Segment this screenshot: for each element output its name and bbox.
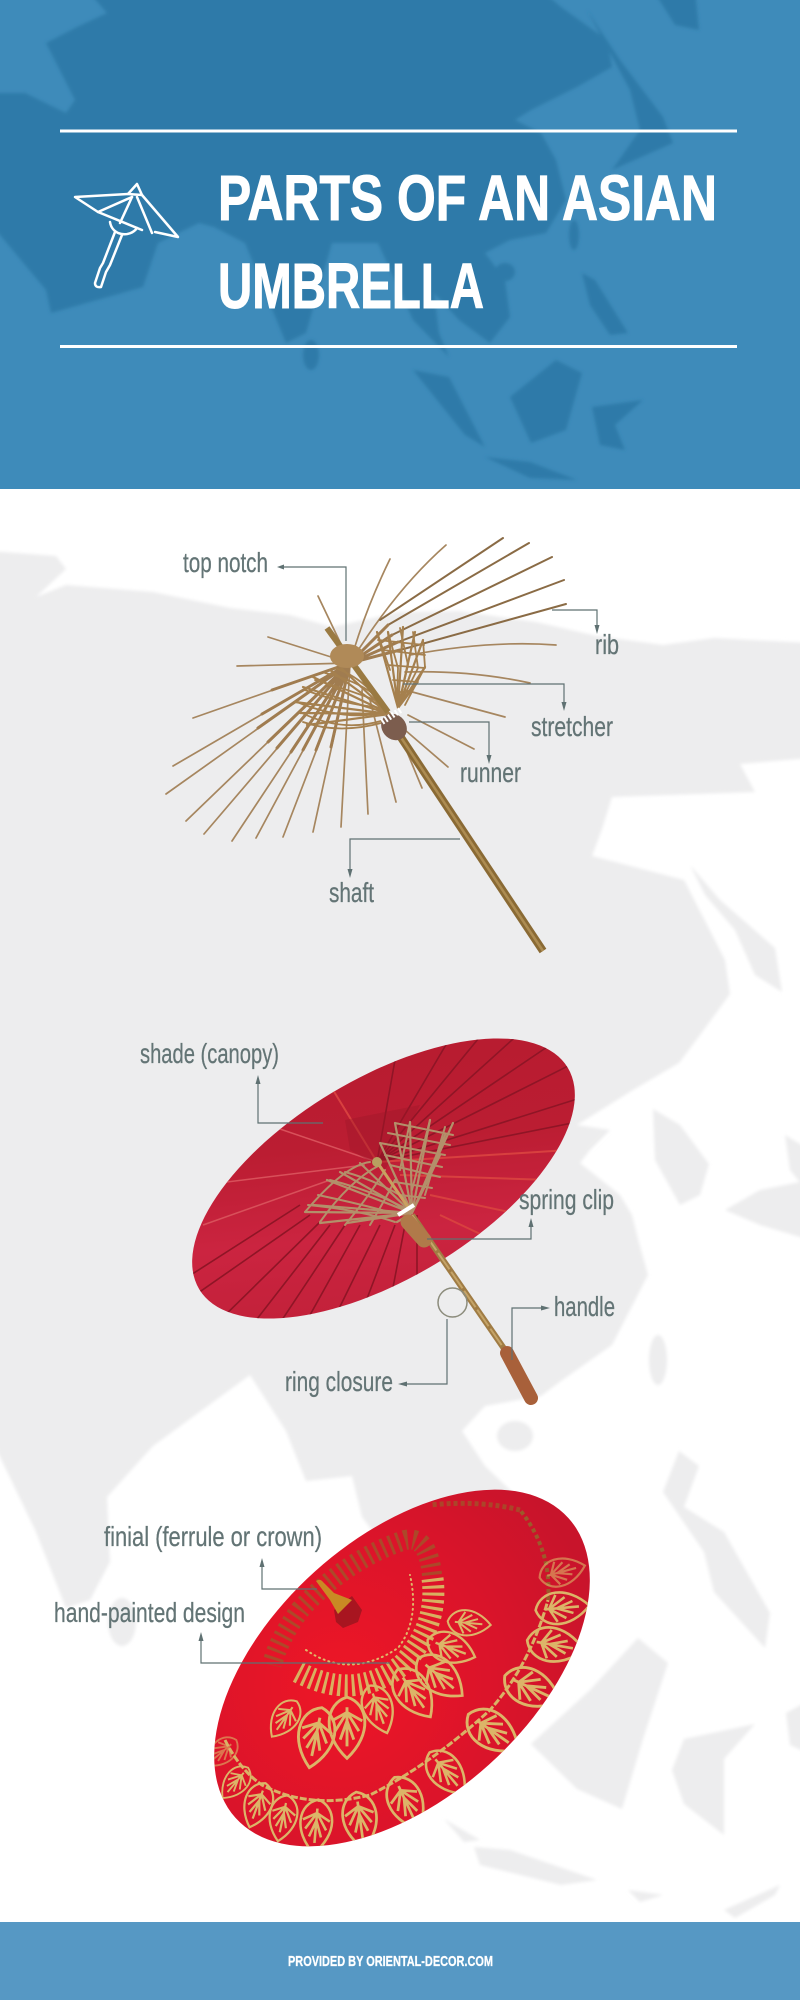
panel: blue header with map	[0, 0, 800, 501]
canopy	[148, 982, 619, 1375]
label: hand-painted design	[54, 1597, 390, 1663]
header rules	[60, 130, 737, 348]
label: top notch	[183, 547, 346, 641]
label: shade (canopy): shade (canopy)	[140, 1038, 279, 1069]
ring	[438, 1288, 467, 1317]
hub	[330, 644, 364, 668]
runner	[408, 1222, 424, 1240]
frame	[305, 1120, 453, 1225]
label: handle	[512, 1291, 615, 1360]
binding	[382, 709, 402, 722]
footer bar: PROVIDED BY ORIENTAL-DECOR.COM	[288, 1954, 493, 1970]
label: shaft: shaft	[329, 877, 374, 908]
label: spring clip: spring clip	[519, 1184, 614, 1215]
shaft	[377, 1162, 410, 1210]
runner	[376, 709, 412, 745]
canopy	[149, 1422, 655, 1914]
umbrella: open red from below	[192, 1038, 575, 1405]
umbrella frame: bamboo ribs and shaft	[166, 538, 566, 951]
label: rib: rib	[595, 629, 619, 660]
border leaves	[199, 1552, 591, 1855]
label: hand-painted design: hand-painted design	[54, 1597, 245, 1628]
label: stretcher: stretcher	[531, 711, 613, 742]
footer bar	[0, 1922, 800, 2000]
shaft	[327, 628, 388, 712]
label: stretcher	[403, 684, 613, 742]
painted chevron band	[225, 1503, 548, 1801]
label: top notch: top notch	[183, 547, 268, 578]
label: ring closure	[285, 1319, 447, 1397]
label: rib	[552, 610, 619, 660]
outer band	[225, 1600, 548, 1801]
dark centre wedge	[345, 1105, 420, 1170]
label: runner: runner	[460, 757, 521, 788]
label: finial (ferrule or crown)	[104, 1521, 322, 1589]
label: spring clip	[427, 1184, 614, 1239]
title: UMBRELLA	[218, 250, 484, 322]
inner leaves	[262, 1609, 492, 1771]
label: runner	[409, 722, 521, 788]
handle	[507, 1353, 531, 1398]
label: shaft	[329, 839, 460, 908]
canopy ribs	[193, 1039, 575, 1318]
icon: umbrella outline	[75, 184, 178, 287]
label: handle: handle	[554, 1291, 615, 1322]
ribs	[166, 538, 566, 841]
label: finial (ferrule or crown): finial (ferrule or crown)	[104, 1521, 322, 1552]
label: shade (canopy)	[140, 1038, 323, 1123]
finial collar	[334, 1596, 362, 1628]
stretchers	[295, 627, 425, 728]
painted pattern	[199, 1503, 591, 1855]
umbrella: painted red from above	[214, 1490, 590, 1846]
label: ring closure: ring closure	[285, 1366, 393, 1397]
title	[218, 162, 717, 322]
panel: white page background with grey map	[0, 489, 800, 1922]
finial	[316, 1580, 352, 1614]
